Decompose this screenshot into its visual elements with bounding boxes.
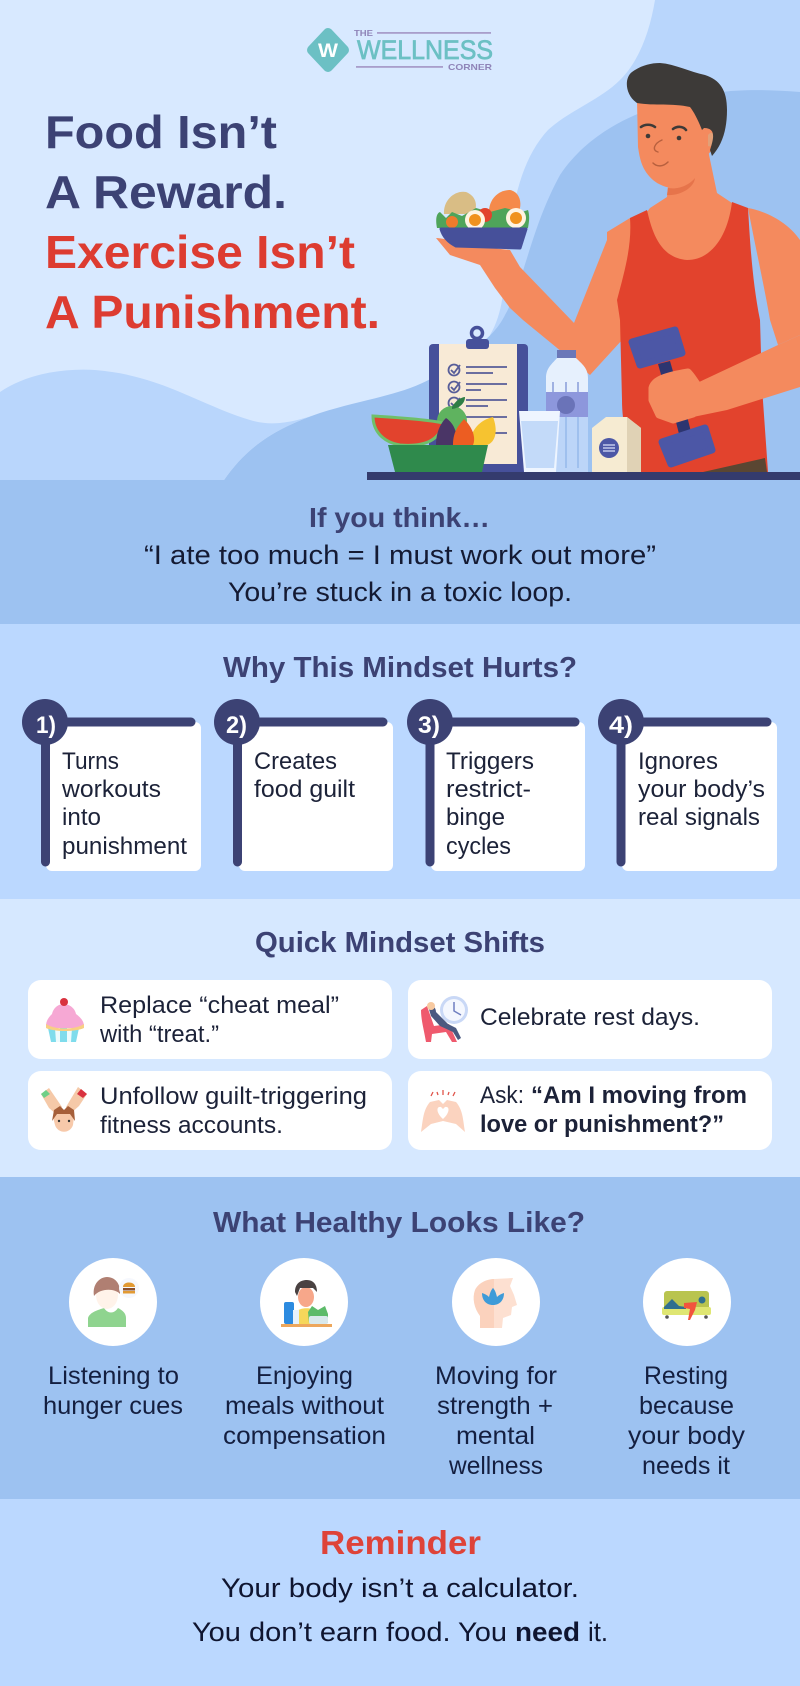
icon: person eating: [281, 1280, 332, 1327]
right upper arm: [748, 208, 800, 345]
title: Food Isn’t: [45, 106, 277, 158]
item: moving for strength: mental: [456, 1422, 535, 1450]
card 3: Triggers: [446, 748, 534, 775]
card: cheat meal: Replace “cheat meal”: [100, 992, 339, 1019]
panel: what healthy looks like: [0, 1177, 800, 1499]
icon: person thinking of burger: [88, 1277, 139, 1327]
right forearm: [672, 335, 800, 417]
fruit bowl: [373, 397, 496, 472]
logo: W: [318, 41, 338, 62]
clipboard checklist: [429, 328, 528, 472]
item: enjoying meals: compensation: [223, 1422, 386, 1450]
icon: person on sofa: [662, 1291, 711, 1320]
item: enjoying meals: Enjoying: [256, 1362, 353, 1390]
panel: reminder: [0, 1499, 800, 1686]
line one: Your body isn’t a calculator.: [221, 1573, 579, 1603]
statement: You’re stuck in a toxic loop.: [228, 577, 572, 607]
face: [637, 100, 712, 188]
card 2: food guilt: [254, 776, 355, 803]
card 4: Ignores: [638, 748, 718, 775]
item: enjoying meals: meals without: [225, 1392, 384, 1420]
item: listening to hunger: [43, 1258, 183, 1420]
item: resting: Resting: [644, 1362, 728, 1390]
heading: Reminder: [320, 1524, 481, 1561]
table: [367, 472, 800, 480]
card: unfollow: fitness accounts.: [100, 1112, 283, 1139]
card: unfollow: Unfollow guilt-triggering: [100, 1083, 367, 1110]
illustration: man with salad and dumbbell: [436, 63, 800, 472]
item: resting: [628, 1258, 746, 1480]
item: listening to hunger: Listening to: [48, 1362, 179, 1390]
card: rest days: [408, 980, 772, 1059]
logo: [312, 28, 493, 72]
panel: if you think: [0, 480, 800, 624]
title: [45, 106, 380, 338]
icon: cupcake: [46, 998, 84, 1042]
title: A Punishment.: [45, 286, 380, 338]
item: resting: because: [639, 1392, 734, 1420]
dumbbell in hand: [632, 330, 712, 464]
facial features: [641, 125, 686, 166]
logo: CORNER: [448, 62, 492, 72]
logo: WELLNESS: [357, 35, 493, 65]
card 4: real signals: [638, 804, 760, 831]
glass of water: [519, 411, 560, 472]
title: A Reward.: [45, 166, 287, 218]
card 3: binge: [446, 804, 505, 831]
item: moving for strength: [435, 1258, 557, 1480]
card 2: Creates: [254, 748, 337, 775]
water bottle: [546, 350, 588, 472]
panel: hero: [0, 0, 800, 480]
neck and chest: [647, 150, 735, 262]
tank top: [617, 202, 768, 472]
item: moving for strength: wellness: [448, 1452, 543, 1480]
card: moving from love: “Am I moving from: [531, 1082, 747, 1109]
card: moving from love: [408, 1071, 772, 1150]
card 1: into: [62, 804, 101, 831]
heading: Quick Mindset Shifts: [255, 927, 545, 959]
card: moving from love: love or punishment?”: [480, 1111, 724, 1138]
card 2: 2): [226, 712, 247, 739]
card 3: cycles: [446, 833, 511, 860]
ear: [704, 128, 718, 151]
card: cheat meal: with “treat.”: [99, 1021, 219, 1048]
line two: You don’t earn food. You: [192, 1617, 507, 1647]
card 3: restrict-: [446, 776, 531, 803]
panel: quick mindset shifts: [0, 899, 800, 1177]
card: rest days: Celebrate rest days.: [480, 1004, 700, 1031]
heading: What Healthy Looks Like?: [213, 1207, 585, 1239]
line two: it.: [588, 1617, 608, 1647]
icon: rest clock chair: [421, 996, 468, 1042]
item: moving for strength: Moving for: [435, 1362, 557, 1390]
heading: Why This Mindset Hurts?: [223, 652, 577, 684]
card 4: [598, 699, 777, 871]
card 1: workouts: [61, 776, 161, 803]
card 3: [407, 699, 585, 871]
card 3: 3): [418, 712, 440, 739]
card 1: Turns: [62, 748, 119, 775]
item: resting: your body: [628, 1422, 746, 1450]
left arm: [436, 210, 650, 375]
item: listening to hunger: hunger cues: [43, 1392, 183, 1420]
card 1: 1): [36, 712, 56, 739]
icon: heart hands: [421, 1090, 465, 1132]
hair: [627, 63, 727, 156]
icon: head with lotus: [474, 1278, 517, 1328]
card 1: punishment: [62, 833, 187, 860]
line two: need: [515, 1617, 580, 1647]
card: cheat meal: [28, 980, 392, 1059]
card 1: [22, 699, 201, 871]
card: moving from love: Ask:: [480, 1082, 524, 1109]
card 4: your body’s: [638, 776, 765, 803]
title: Exercise Isn’t: [45, 226, 355, 278]
salad bowl: [436, 190, 529, 248]
card: unfollow: [28, 1071, 392, 1150]
milk carton: [592, 417, 641, 472]
card 2: [214, 699, 393, 871]
icon: hands and head: [41, 1087, 87, 1132]
logo: THE: [354, 28, 373, 38]
heading: If you think…: [309, 502, 490, 533]
item: enjoying meals: [223, 1258, 386, 1450]
panel: why this mindset hurts: [0, 624, 800, 899]
quote: “I ate too much = I must work out more”: [144, 540, 656, 570]
card 4: 4): [609, 712, 633, 739]
item: moving for strength: strength +: [437, 1392, 553, 1420]
item: resting: needs it: [642, 1452, 730, 1480]
